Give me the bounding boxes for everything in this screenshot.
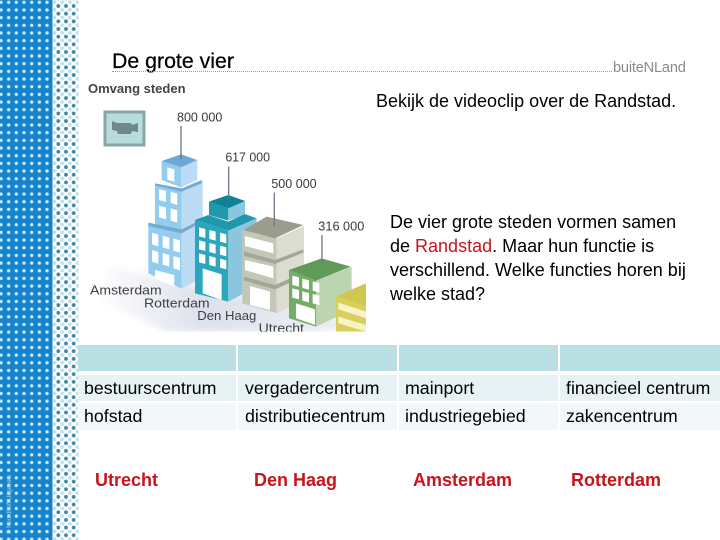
cell: mainport: mainport <box>405 378 474 398</box>
city labels: Amsterdam <box>90 283 162 298</box>
value labels <box>177 110 364 233</box>
value labels: 316 000 <box>318 219 364 233</box>
cell: bestuurscentrum <box>78 375 236 401</box>
cell: zakencentrum: zakencentrum <box>566 406 678 426</box>
building: Utrecht <box>289 258 352 327</box>
header cell 2 <box>238 345 397 371</box>
building: Den Haag <box>242 217 304 313</box>
table: functions <box>78 345 720 430</box>
header cell 4 <box>560 345 720 371</box>
paragraph: four big cities <box>390 212 686 304</box>
icon: video camera button <box>105 112 144 145</box>
cell: vergadercentrum <box>238 375 397 401</box>
value labels: 800 000 <box>177 110 222 124</box>
header cell 3 <box>399 345 558 371</box>
value labels: 500 000 <box>271 177 317 191</box>
answer: Rotterdam: Rotterdam <box>571 470 661 490</box>
answer: Amsterdam: Amsterdam <box>413 470 512 490</box>
cell: distributiecentrum <box>238 403 397 430</box>
city labels: Rotterdam <box>144 296 210 311</box>
cell: financieel centrum <box>560 375 720 401</box>
building: Amsterdam <box>148 154 203 288</box>
cell: zakencentrum <box>560 403 720 430</box>
paragraph: four big cities: welke stad? <box>390 284 485 304</box>
header cell 1 <box>78 345 236 371</box>
logo: buiteNLand <box>613 60 686 76</box>
answer: Utrecht: Utrecht <box>95 470 158 490</box>
cell: hofstad <box>78 403 236 430</box>
answer: Den Haag: Den Haag <box>254 470 337 490</box>
building: Rotterdam <box>195 195 257 302</box>
cell: hofstad: hofstad <box>84 406 142 426</box>
city labels: Den Haag <box>197 308 256 323</box>
sidebar: dotted blue band <box>0 0 78 540</box>
cell: industriegebied: industriegebied <box>405 406 526 426</box>
paragraph: four big cities: verschillend. Welke functies horen bij <box>390 260 686 280</box>
cell: industriegebied <box>399 403 558 430</box>
ground shadow <box>120 273 336 332</box>
city labels <box>90 285 304 332</box>
building: fifth city (yellow, cropped) <box>336 283 366 332</box>
cell: financieel centrum: financieel centrum <box>566 378 710 398</box>
cell: bestuurscentrum: bestuurscentrum <box>84 378 216 398</box>
sidebar: dotted blue band: © Noordhoff Uitgevers <box>6 475 13 534</box>
cell: vergadercentrum: vergadercentrum <box>245 378 379 398</box>
chart heading: Omvang steden <box>88 81 186 96</box>
value labels: 617 000 <box>225 151 270 165</box>
paragraph: four big cities: de Randstad. Maar hun functie is <box>390 236 654 256</box>
value leaders <box>181 126 322 263</box>
dotted title rule <box>112 71 612 72</box>
instruction: video clip: Bekijk de videoclip over de Randstad. <box>376 91 676 111</box>
paragraph: four big cities: De vier grote steden vormen samen <box>390 212 676 232</box>
chart: city size buildings <box>88 81 366 332</box>
title: De grote vier <box>112 49 234 73</box>
cell: distributiecentrum: distributiecentrum <box>245 406 385 426</box>
cell: mainport <box>399 375 558 401</box>
